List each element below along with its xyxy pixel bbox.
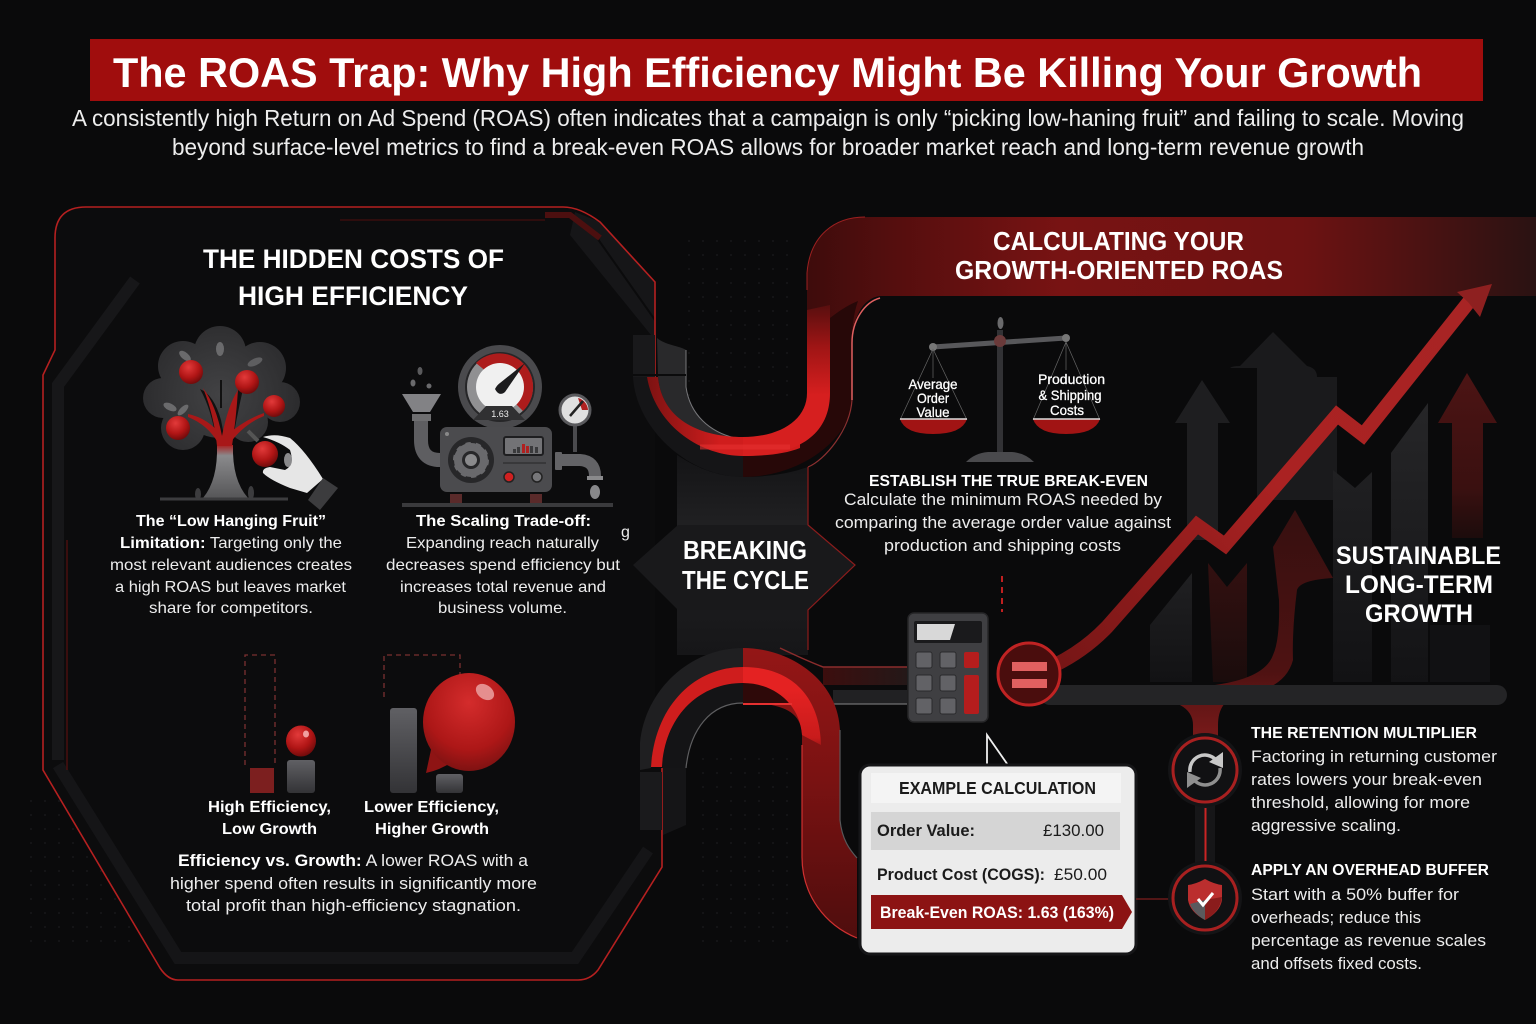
connector: top U tube and calculating banner xyxy=(633,217,1536,477)
chart labels: Lower Efficiency, xyxy=(364,799,499,816)
stray letter fragment: g xyxy=(621,524,630,541)
heading: hidden costs xyxy=(203,244,504,311)
row: order value: £130.00 xyxy=(1043,822,1104,840)
icon: retention circle xyxy=(1168,733,1242,807)
text: low hanging fruit: The “Low Hanging Fruit” xyxy=(136,513,326,530)
chart labels: High Efficiency, xyxy=(208,799,331,816)
text: low hanging fruit xyxy=(110,513,352,617)
scale labels: Average xyxy=(908,376,958,392)
text: sustainable long-term growth: SUSTAINABLE xyxy=(1336,542,1501,570)
text: efficiency vs growth: higher spend often results in significantly more xyxy=(170,875,537,893)
chart labels: Low Growth xyxy=(222,821,317,838)
text: retention multiplier xyxy=(1251,725,1497,835)
title banner: The ROAS Trap: Why High Efficiency Might Be Killing Your Growth xyxy=(113,49,1422,96)
text: low hanging fruit: Limitation: Targeting only the xyxy=(120,535,342,552)
heading: calculating: CALCULATING YOUR xyxy=(993,226,1244,256)
text: establish the true break-even xyxy=(835,473,1171,555)
text: retention multiplier: aggressive scaling. xyxy=(1251,816,1401,835)
central column: breaking the cycle xyxy=(633,455,855,655)
heading: calculating: GROWTH-ORIENTED ROAS xyxy=(955,255,1283,285)
card: example calculation xyxy=(860,765,1136,954)
row: order value: Order Value: xyxy=(877,822,975,840)
arrow: red growth line xyxy=(1055,284,1492,665)
icon: scaling machine with gauge xyxy=(402,345,613,505)
text: retention multiplier: Factoring in returning customer xyxy=(1251,747,1497,766)
central column: breaking the cycle: THE CYCLE xyxy=(682,565,809,595)
text: retention multiplier: rates lowers your break-even xyxy=(1251,770,1482,789)
heading: hidden costs: THE HIDDEN COSTS OF xyxy=(203,244,504,274)
text: establish the true break-even: ESTABLISH THE TRUE BREAK-EVEN xyxy=(869,473,1148,490)
chart labels: Higher Growth xyxy=(375,821,489,838)
text: overhead buffer: Start with a 50% buffer for xyxy=(1251,885,1459,904)
chart labels xyxy=(208,799,499,838)
text: overhead buffer: overheads; reduce this xyxy=(1251,908,1421,927)
text: establish the true break-even: Calculate the minimum ROAS needed by xyxy=(844,490,1163,509)
scale labels xyxy=(908,371,1105,420)
scale labels: Order xyxy=(917,390,949,406)
text: efficiency vs growth: Efficiency vs. Growth: A lower ROAS with a xyxy=(178,852,529,870)
dashed connector xyxy=(1001,576,1003,612)
connector: retention to shield xyxy=(1195,800,1215,870)
scale labels: Value xyxy=(916,404,950,420)
text: retention multiplier: threshold, allowing for more xyxy=(1251,793,1470,812)
icon: equals circle xyxy=(998,643,1060,705)
icon: apple tree with hand xyxy=(143,326,338,510)
chart: lower efficiency higher growth xyxy=(384,655,515,793)
scale labels: Costs xyxy=(1050,402,1084,418)
text: efficiency vs growth: total profit than high-efficiency stagnation. xyxy=(186,897,521,915)
text: scaling trade-off: decreases spend efficiency but xyxy=(386,557,621,574)
subtitle: beyond surface-level metrics to find a break-even ROAS allows for broader market reach and long-term revenue growth xyxy=(172,134,1364,160)
text: scaling trade-off: Expanding reach naturally xyxy=(406,535,599,552)
text: sustainable long-term growth: GROWTH xyxy=(1365,600,1473,628)
text: overhead buffer xyxy=(1251,862,1489,973)
callout pointer xyxy=(987,735,1010,768)
text: scaling trade-off: The Scaling Trade-off: xyxy=(416,513,591,530)
icon: balance scale xyxy=(900,317,1105,462)
row: product cost: £50.00 xyxy=(1054,866,1107,884)
row: break-even result xyxy=(871,895,1132,929)
text: sustainable long-term growth xyxy=(1336,542,1501,628)
text: efficiency vs growth xyxy=(170,852,537,915)
icon: calculator xyxy=(908,613,988,722)
central column: breaking the cycle: BREAKING xyxy=(683,535,807,565)
text: sustainable long-term growth: LONG-TERM xyxy=(1345,571,1493,599)
icon: shield circle xyxy=(1168,861,1242,935)
arrow: retention feed into growth xyxy=(1180,510,1333,740)
row: product cost: Product Cost (COGS): xyxy=(877,866,1045,884)
text: scaling trade-off: business volume. xyxy=(438,600,567,617)
text: low hanging fruit: most relevant audiences creates xyxy=(110,557,352,574)
heading: hidden costs: HIGH EFFICIENCY xyxy=(238,281,468,311)
text: overhead buffer: and offsets fixed costs. xyxy=(1251,954,1422,973)
card: example calculation: EXAMPLE CALCULATION xyxy=(899,778,1096,798)
text: overhead buffer: APPLY AN OVERHEAD BUFFER xyxy=(1251,862,1489,879)
subtitle: A consistently high Return on Ad Spend (ROAS) often indicates that a campaign is only “picking low-haning fruit” and failing to scale. Moving xyxy=(72,105,1464,131)
scale labels: & Shipping xyxy=(1038,387,1102,403)
text: overhead buffer: percentage as revenue scales xyxy=(1251,931,1486,950)
panel: hidden costs frame xyxy=(43,207,662,980)
text: scaling trade-off xyxy=(386,513,621,617)
row: break-even result: Break-Even ROAS: 1.63 (163%) xyxy=(880,903,1114,922)
scale labels: Production xyxy=(1038,371,1105,387)
text: retention multiplier: THE RETENTION MULTIPLIER xyxy=(1251,725,1477,742)
grey horizontal track xyxy=(1040,685,1507,705)
connector: lower arch tube xyxy=(640,648,907,938)
text: low hanging fruit: share for competitors. xyxy=(149,600,313,617)
text: low hanging fruit: a high ROAS but leaves market xyxy=(115,579,347,596)
row: order value xyxy=(871,812,1120,850)
chart: high efficiency low growth xyxy=(245,655,316,793)
subtitle xyxy=(72,105,1464,160)
text: establish the true break-even: production and shipping costs xyxy=(884,536,1121,555)
heading: calculating xyxy=(955,226,1283,285)
decorative dot textures xyxy=(30,230,800,950)
right side graphic: ghost growth arrows xyxy=(1150,332,1497,682)
text: scaling trade-off: increases total revenue and xyxy=(400,579,606,596)
icon: scaling machine with gauge: 1.63 xyxy=(491,409,509,419)
connector: card to shield xyxy=(1136,898,1172,900)
text: establish the true break-even: comparing the average order value against xyxy=(835,513,1171,532)
